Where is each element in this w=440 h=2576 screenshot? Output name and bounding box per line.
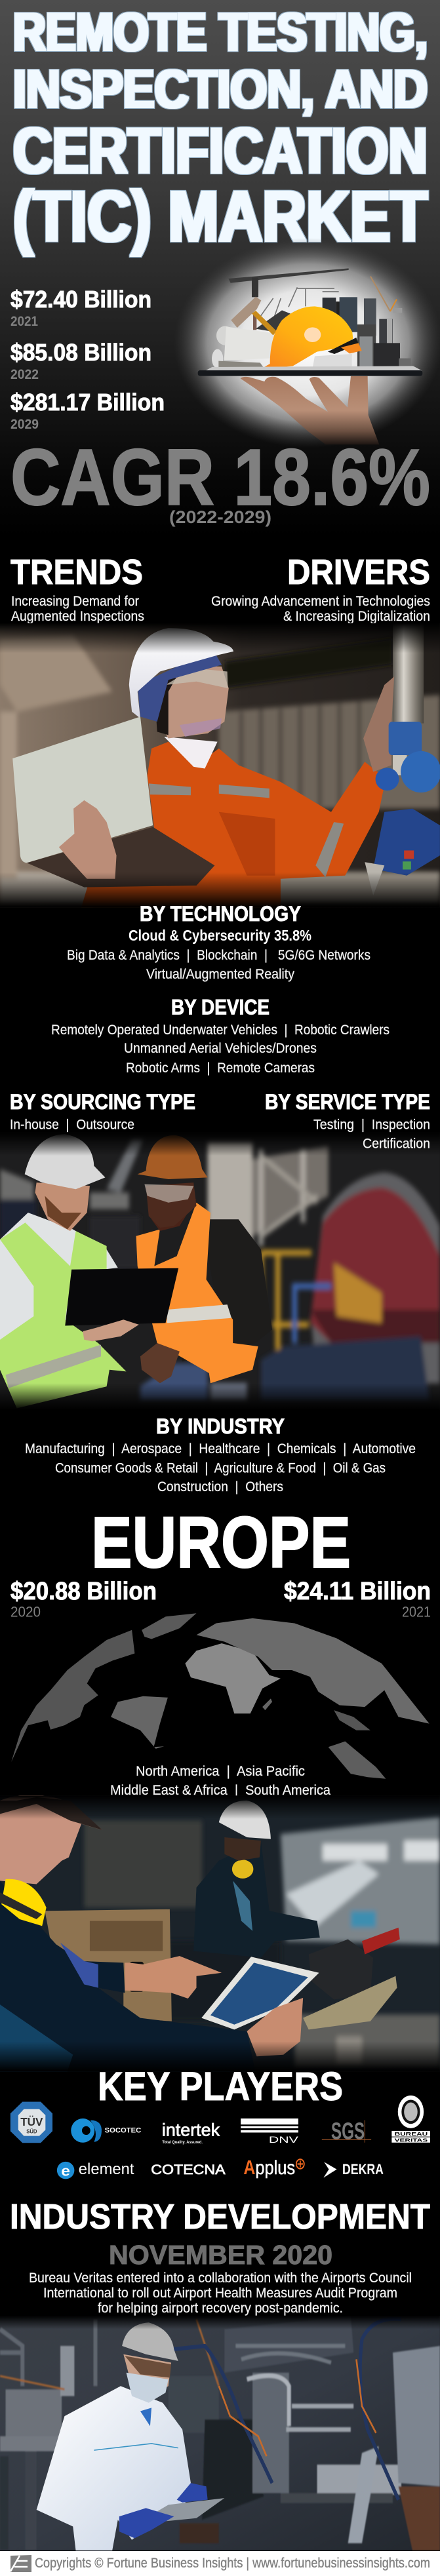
background worker — [193, 1801, 320, 1958]
blueprints — [212, 326, 273, 370]
logo: intertek — [162, 2121, 220, 2145]
logo: SGS: SGS — [331, 2118, 365, 2144]
by technology: BY TECHNOLOGY — [140, 902, 301, 926]
by industry: Construction | Others — [157, 1479, 283, 1494]
market value stats: 2029 — [10, 417, 39, 432]
logo: TUV SUD: TÜV — [20, 2115, 43, 2129]
photo: engineer in orange coverall with laptop — [0, 623, 440, 907]
development description — [29, 2270, 412, 2316]
header gradient background — [0, 0, 440, 537]
logo: TUV SUD: SÜD — [26, 2128, 37, 2135]
photo: lab-coat inspector with tablet in plant — [0, 2316, 440, 2550]
trends heading and text: TRENDS — [10, 553, 143, 592]
by device: Remotely Operated Underwater Vehicles | Robotic Crawlers — [51, 1022, 390, 1038]
market value stats: 2022 — [10, 367, 39, 382]
cables — [174, 2319, 401, 2500]
metal robot arm — [363, 623, 440, 895]
market value stats: 2021 — [10, 314, 38, 329]
drivers heading and text — [211, 553, 430, 624]
tablet held by inspectors — [65, 1268, 178, 1325]
logo: SOCOTEC — [71, 2118, 142, 2143]
trends heading and text — [10, 553, 144, 624]
logo: DEKRA: DEKRA — [342, 2162, 384, 2178]
by industry: Consumer Goods & Retail | Agriculture & Food | Oil & Gas — [55, 1460, 386, 1476]
logo: Bureau Veritas: BUREAU — [395, 2132, 428, 2137]
development description: for helping airport recovery post-pandemic. — [98, 2300, 343, 2316]
footer strip — [0, 2551, 440, 2576]
logo: DEKRA — [323, 2162, 384, 2178]
market value stats — [10, 286, 165, 432]
blue gloves — [119, 2483, 208, 2538]
by device — [51, 995, 390, 1076]
logo: COTECNA: COTECNA — [151, 2162, 226, 2178]
hero illustration: helmet and city on tablet held by hand — [174, 238, 440, 448]
by industry: BY INDUSTRY — [156, 1415, 285, 1438]
hammer — [231, 297, 277, 336]
development description: International to roll out Airport Health Measures Audit Program — [43, 2285, 397, 2301]
hand holding tablet — [247, 1998, 303, 2056]
logo: Applus — [243, 2156, 304, 2179]
engineer — [81, 628, 386, 907]
cranes — [228, 268, 402, 330]
machine motor — [303, 1928, 400, 2029]
by sourcing type: BY SOURCING TYPE — [10, 1090, 195, 1114]
inspector in orange vest — [136, 1135, 272, 1383]
key player logos — [10, 2096, 430, 2179]
hand on laptop — [59, 800, 117, 879]
regions list — [110, 1763, 330, 1798]
inspector in green vest — [0, 1134, 127, 1408]
development description: Bureau Veritas entered into a collaboration with the Airports Council — [29, 2270, 412, 2286]
by service type: Testing | Inspection — [313, 1117, 430, 1133]
tablet — [151, 2498, 224, 2522]
region heading: EUROPE — [91, 1502, 351, 1583]
development date: NOVEMBER 2020 — [109, 2240, 332, 2270]
regional value 2021 — [284, 1578, 431, 1620]
by industry — [25, 1415, 416, 1494]
CAGR figure: (2022-2029) — [169, 507, 271, 527]
red machine — [311, 1173, 440, 1383]
regions list: Middle East & Africa | South America — [110, 1782, 330, 1798]
world map — [11, 1613, 430, 1779]
by sourcing type — [10, 1090, 195, 1133]
regional value 2020: 2020 — [10, 1603, 41, 1620]
by device: BY DEVICE — [171, 995, 270, 1019]
logo: Bureau Veritas: VERITAS — [395, 2138, 428, 2143]
photo: technician pointing at tablet in factory — [0, 1795, 440, 2071]
title — [13, 1, 428, 257]
logo: intertek: intertek — [162, 2121, 220, 2140]
laptop — [12, 716, 214, 888]
hand — [241, 376, 379, 444]
logo: element: e — [61, 2163, 70, 2179]
by device: Robotic Arms | Remote Cameras — [126, 1060, 315, 1076]
trends heading and text: Increasing Demand for — [11, 593, 139, 609]
by technology: Big Data & Analytics | Blockchain | 5G/6G Networks — [67, 947, 370, 963]
by sourcing type: In-house | Outsource — [10, 1117, 134, 1133]
tablet — [198, 366, 422, 376]
logo: element — [57, 2160, 134, 2179]
city skyline — [256, 297, 411, 368]
logo: TUV SUD — [10, 2102, 52, 2143]
hand holding tablet — [83, 1319, 139, 1341]
lower machines — [261, 1337, 430, 1400]
inspector — [37, 2322, 191, 2550]
regional value 2021: $24.11 Billion — [284, 1578, 431, 1605]
footer logo — [10, 2555, 31, 2572]
regional value 2021: 2021 — [402, 1603, 431, 1620]
hard hat — [259, 306, 362, 370]
by technology: Cloud & Cybersecurity 35.8% — [129, 927, 311, 944]
by technology: Virtual/Augmented Reality — [146, 966, 294, 982]
logo: SOCOTEC: SOCOTEC — [105, 2127, 142, 2135]
logo: Bureau Veritas — [391, 2096, 430, 2143]
market value stats: $281.17 Billion — [10, 389, 165, 416]
foreground technician — [0, 1795, 255, 2071]
market value stats: $72.40 Billion — [10, 286, 151, 313]
drivers heading and text: DRIVERS — [287, 553, 430, 592]
regions list: North America | Asia Pacific — [136, 1763, 305, 1779]
logo: intertek: Total Quality. Assured. — [162, 2139, 203, 2145]
logo: DNV — [241, 2118, 298, 2145]
regional value 2020: $20.88 Billion — [10, 1578, 157, 1605]
logo: DNV: DNV — [269, 2134, 298, 2145]
by technology — [67, 902, 370, 982]
regional value 2020 — [10, 1578, 157, 1620]
handheld tablet — [201, 1957, 319, 2029]
photo: two inspectors in hi-vis vests with tablet — [0, 1133, 440, 1410]
by service type: Certification — [363, 1135, 430, 1151]
market value stats: $85.08 Billion — [10, 339, 151, 366]
logo: Applus: pplus — [255, 2156, 295, 2179]
key players heading: KEY PLAYERS — [98, 2064, 343, 2109]
trends heading and text: Augmented Inspections — [11, 608, 144, 624]
by service type — [265, 1090, 430, 1151]
cardboard box — [45, 1909, 172, 2021]
logo: Applus: A — [243, 2156, 255, 2179]
by device: Unmanned Aerial Vehicles/Drones — [124, 1040, 317, 1056]
logo: element: element — [79, 2160, 134, 2178]
